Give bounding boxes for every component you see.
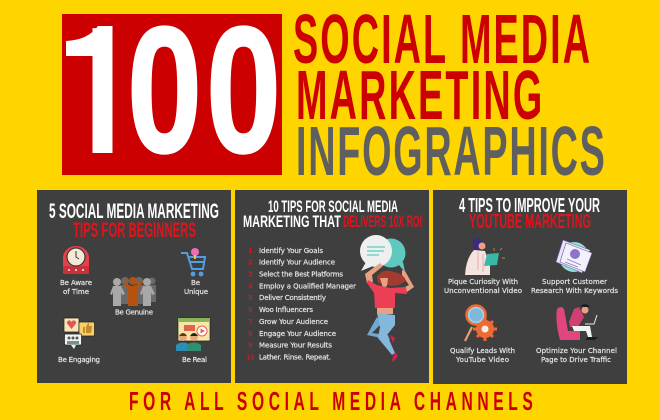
numbered tips list: 4	[248, 282, 253, 290]
numbered tips list: 10	[246, 352, 255, 362]
numbered tips list: 9	[248, 340, 253, 350]
numbered tips list: Identify Your Audience	[259, 258, 335, 266]
numbered tips list: Select the Best Platforms	[259, 270, 343, 278]
panel: 10 tips for social media marketing	[235, 190, 429, 383]
label: optimize your channel: Page to Drive Traffic	[541, 356, 611, 364]
label: optimize your channel	[536, 347, 617, 364]
panel 2 heading: DELIVERS 10X ROI	[343, 212, 422, 231]
label: optimize your channel: Optimize Your Channel	[536, 347, 617, 355]
icon: clock	[63, 246, 89, 274]
icon: person in armchair with laptop	[556, 304, 598, 340]
label: support customer research	[531, 278, 618, 295]
numbered tips list: 3	[248, 270, 253, 278]
label: pique curiosity	[444, 278, 522, 295]
numbered tips list: Engage Your Audience	[259, 330, 336, 338]
label: be unique: Unique	[184, 288, 208, 296]
numbered tips list: Woo Influencers	[259, 306, 313, 314]
label: be unique	[184, 279, 208, 296]
label: be unique: Be	[191, 279, 200, 287]
panel 1 heading: 5 SOCIAL MEDIA MARKETING	[49, 200, 219, 223]
badge: 100	[60, 0, 282, 190]
panel 3 heading	[459, 195, 600, 233]
title: INFOGRAPHICS	[296, 112, 605, 190]
label: pique curiosity: Unconventional Video	[444, 287, 522, 295]
label: be aware of time: Be Aware	[60, 279, 92, 287]
title	[293, 0, 605, 190]
numbered tips list	[246, 246, 356, 362]
label: be genuine: Be Genuine	[115, 308, 153, 316]
numbered tips list: Lather. Rinse. Repeat.	[259, 354, 331, 362]
numbered tips list: 1	[248, 246, 253, 255]
icon: engagement speech bubbles	[64, 318, 94, 349]
illustration: woman with speech bubbles	[360, 235, 414, 362]
icon: shopping cart	[181, 248, 205, 276]
panel: 4 tips to improve youtube marketing	[433, 190, 627, 384]
icon: group of people	[110, 277, 156, 306]
panel 2 heading: MARKETING THAT	[243, 212, 341, 231]
icon: research documents	[556, 240, 592, 273]
panel: 5 tips for beginners	[37, 190, 231, 383]
label: be real: Be Real	[182, 356, 207, 364]
numbered tips list: Employ a Qualified Manager	[259, 282, 356, 290]
icon: video and people	[176, 318, 210, 351]
panel 1 heading	[49, 200, 219, 242]
label: be engaging: Be Engaging	[58, 356, 100, 364]
numbered tips list: 5	[248, 293, 253, 302]
numbered tips list: 6	[248, 305, 253, 314]
panel 2 heading: 10 TIPS FOR SOCIAL MEDIA	[268, 197, 398, 216]
label: be aware of time	[60, 279, 92, 296]
numbered tips list: Grow Your Audience	[259, 318, 328, 326]
title: MARKETING	[296, 56, 542, 134]
label: be aware of time: of Time	[63, 288, 89, 296]
title: SOCIAL MEDIA	[293, 0, 590, 78]
label: support customer research: Research With Keywords	[531, 287, 618, 295]
panel 1 heading: TIPS FOR BEGINNERS	[73, 219, 196, 242]
numbered tips list: Identify Your Goals	[259, 247, 323, 255]
numbered tips list: 2	[248, 258, 253, 266]
numbered tips list: 7	[248, 317, 253, 326]
numbered tips list: 8	[248, 329, 253, 338]
label: qualify leads: Qualify Leads With	[450, 347, 515, 355]
footer tagline: FOR ALL SOCIAL MEDIA CHANNELS	[129, 387, 533, 416]
panel 2 heading	[243, 197, 422, 231]
numbered tips list: Deliver Consistently	[259, 294, 326, 302]
numbered tips list: Measure Your Results	[259, 342, 332, 350]
icon: woman with tablet	[465, 238, 505, 275]
label: qualify leads: YouTube Video	[455, 356, 509, 364]
icon: magnifier and gear	[465, 306, 497, 341]
label: pique curiosity: Pique Curiosity With	[448, 278, 518, 286]
label: qualify leads	[450, 347, 515, 364]
label: support customer research: Support Customer	[542, 278, 607, 286]
